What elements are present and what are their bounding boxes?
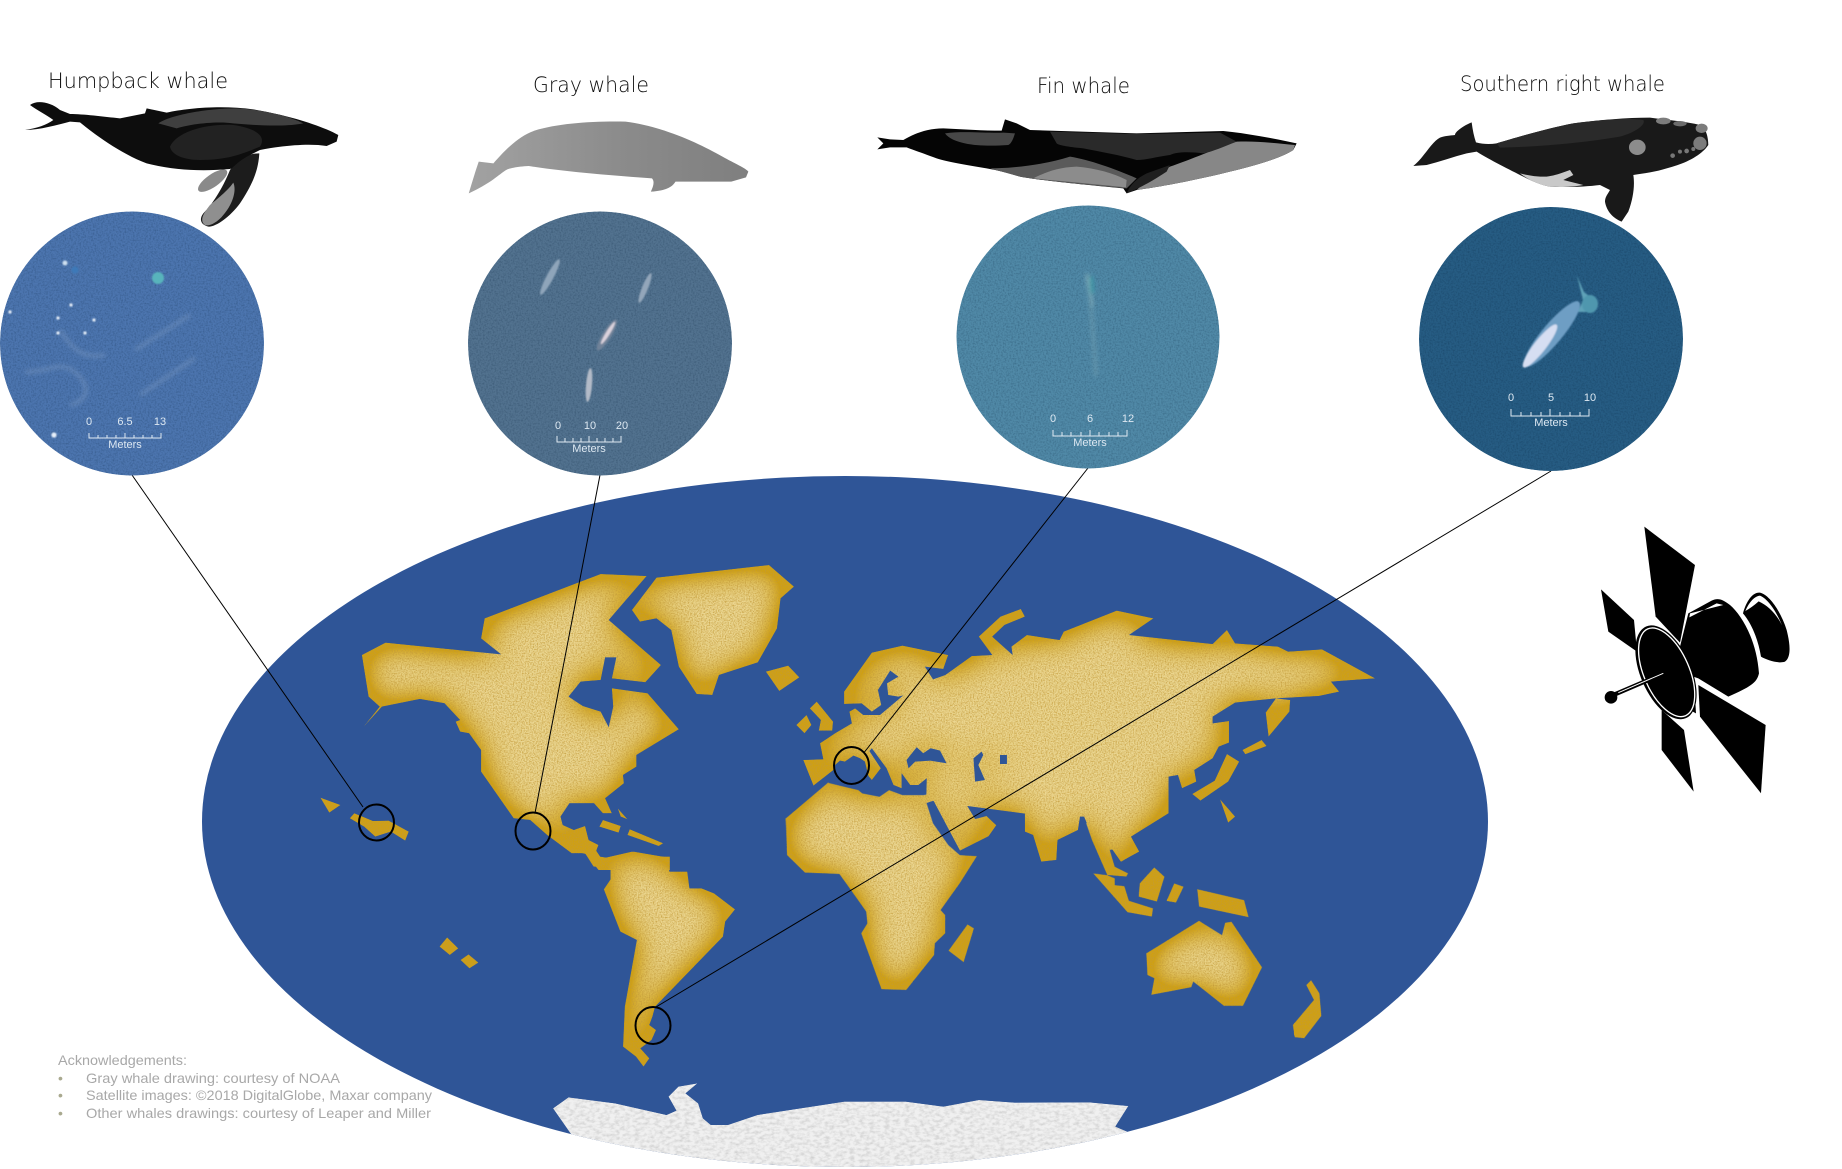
- whale drawing: gray: [469, 122, 748, 193]
- leader line: fin whale: [864, 468, 1088, 752]
- scale bar: Meters: [572, 443, 606, 455]
- scale bar: [1050, 413, 1134, 449]
- leader line: humpback whale: [132, 475, 363, 807]
- scale bar: 13: [154, 416, 166, 428]
- acknowledgements: Acknowledgements:: [58, 1052, 187, 1068]
- Eurasia: [796, 609, 1375, 862]
- scale bar: Meters: [108, 439, 142, 451]
- heading: Fin whale: Fin whale: [1037, 74, 1130, 98]
- leader line: southern right whale: [656, 471, 1551, 1007]
- scale bar: 0: [555, 420, 561, 432]
- heading: Gray whale: Gray whale: [533, 73, 649, 97]
- Africa, Southeast Asia and Australia: [786, 783, 1321, 1038]
- satellite photo: gray whale: [468, 212, 732, 476]
- scale bar: 10: [584, 420, 596, 432]
- icon: satellite: [1601, 527, 1790, 793]
- satellite photo: fin whale: [956, 206, 1220, 468]
- scale bar: 20: [616, 420, 628, 432]
- location marker: Baja California: [516, 812, 550, 850]
- South America and Pacific islands: [440, 850, 735, 1067]
- whale in water: [1087, 275, 1096, 375]
- scale bar: Meters: [1534, 417, 1568, 429]
- satellite photo: southern right whale: [1419, 207, 1683, 471]
- scale bar: 12: [1122, 413, 1134, 425]
- whale drawing: humpback: [25, 102, 338, 227]
- acknowledgements: Satellite images: ©2018 DigitalGlobe, Maxar company: [86, 1087, 432, 1103]
- world map: [202, 476, 1488, 1169]
- Antarctica: [553, 1083, 1133, 1169]
- location marker: Mediterranean: [834, 747, 869, 784]
- satellite photo: humpback whale: [0, 212, 264, 476]
- acknowledgements: [58, 1052, 432, 1121]
- whale drawing: southern right: [1413, 118, 1708, 222]
- location marker: Patagonia: [636, 1007, 670, 1044]
- location marker: Hawaii: [359, 804, 394, 840]
- scale bar: 6.5: [117, 416, 133, 428]
- acknowledgements: Other whales drawings: courtesy of Leaper and Miller: [86, 1105, 431, 1121]
- acknowledgements: Gray whale drawing: courtesy of NOAA: [86, 1070, 341, 1086]
- continents: [320, 565, 1375, 1067]
- heading: Southern right whale: Southern right whale: [1460, 72, 1665, 96]
- scale bar: [1508, 392, 1596, 429]
- acknowledgements: •: [58, 1105, 63, 1121]
- leader line: gray whale: [535, 475, 600, 813]
- acknowledgements: •: [58, 1087, 63, 1103]
- scale bar: 6: [1087, 413, 1093, 425]
- scale bar: 5: [1548, 392, 1554, 404]
- teal spot: [152, 272, 164, 284]
- scale bar: 10: [1584, 392, 1596, 404]
- whale drawing: fin: [877, 119, 1297, 193]
- North America: [320, 574, 679, 870]
- scale bar: 0: [1050, 413, 1056, 425]
- whale in water: [1517, 276, 1598, 373]
- scale bar: [555, 420, 628, 455]
- scale bar: 0: [1508, 392, 1514, 404]
- heading: Humpback whale: Humpback whale: [48, 69, 228, 93]
- scale bar: Meters: [1073, 437, 1107, 449]
- ocean ellipse: [202, 476, 1488, 1167]
- Greenland and Iceland: [632, 565, 799, 695]
- whales in water: [538, 258, 654, 402]
- bright specks: [8, 260, 96, 438]
- whale traces: [25, 315, 195, 405]
- scale bar: [86, 416, 166, 451]
- acknowledgements: •: [58, 1070, 63, 1086]
- scale bar: 0: [86, 416, 92, 428]
